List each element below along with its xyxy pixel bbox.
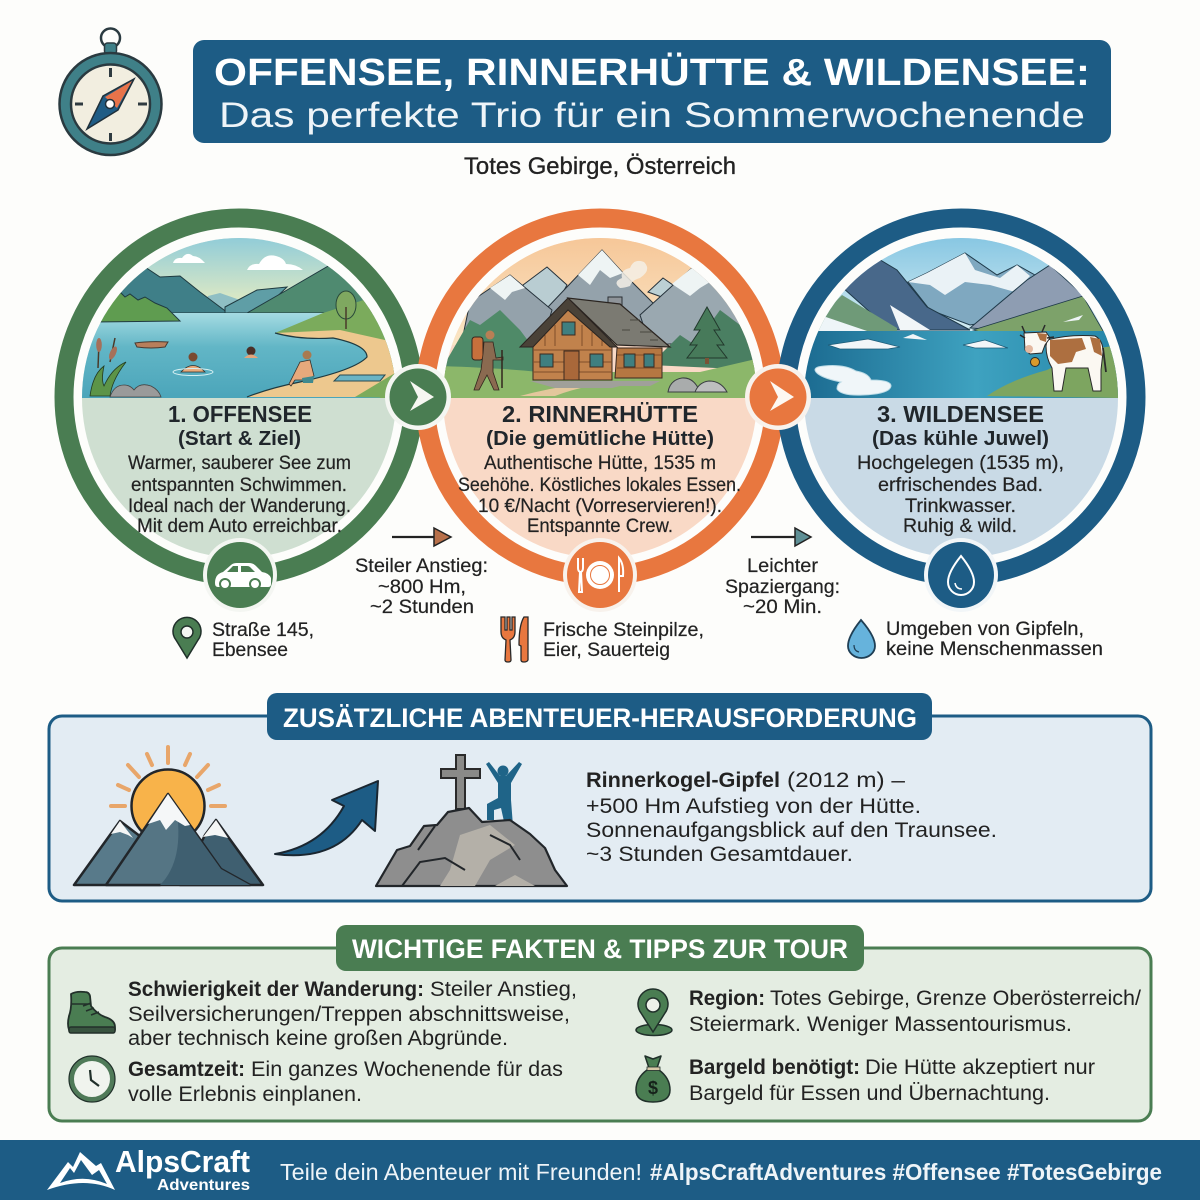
arrow: ascent to Rinnerhütte xyxy=(392,528,451,546)
icon: money bag: $ xyxy=(648,1078,658,1098)
text: no crowds: keine Menschenmassen xyxy=(886,639,1103,660)
text: Offensee description: entspannten Schwimmen. xyxy=(131,475,347,496)
text: Rinnerkogel details: ~3 Stunden Gesamtdauer. xyxy=(586,843,853,866)
text: Wildensee description: Ruhig & wild. xyxy=(903,516,1017,537)
scene: mountain hut with hiker xyxy=(440,235,760,398)
icon: fork and knife xyxy=(501,617,528,662)
heading: Rinnerhütte: (Die gemütliche Hütte) xyxy=(486,428,714,450)
text: difficulty xyxy=(128,978,577,1050)
title banner: Das perfekte Trio für ein Sommerwochenende xyxy=(219,96,1085,135)
text: no crowds: Umgeben von Gipfeln, xyxy=(886,619,1084,640)
text: food: Frische Steinpilze, xyxy=(543,620,704,641)
heading: additional challenge: ZUSÄTZLICHE ABENTEUER-HERAUSFORDERUNG xyxy=(283,703,917,733)
text: steep ascent: ~800 Hm, xyxy=(378,577,466,598)
text: easy walk: Spaziergang: xyxy=(725,577,840,598)
heading: key facts xyxy=(336,925,864,971)
heading: Wildensee xyxy=(872,401,1049,450)
icon: car badge xyxy=(203,538,277,612)
heading: Offensee: (Start & Ziel) xyxy=(178,428,301,450)
text: total time: Gesamtzeit: xyxy=(128,1058,245,1081)
text: hashtags: #AlpsCraftAdventures #Offensee #TotesGebirge xyxy=(650,1159,1162,1185)
heading: Rinnerhütte: 2. RINNERHÜTTE xyxy=(502,401,698,427)
text: cash needed xyxy=(689,1056,1095,1105)
icon: compass xyxy=(60,28,162,155)
text: Rinnerhütte description: Entspannte Crew. xyxy=(527,516,673,537)
text: total time: volle Erlebnis einplanen. xyxy=(128,1083,362,1106)
icon: region pin xyxy=(636,989,672,1036)
text: easy walk xyxy=(725,556,840,618)
text: cash needed: Bargeld benötigt: xyxy=(689,1056,860,1079)
icon: plate badge xyxy=(563,538,637,612)
text: Rinnerkogel details xyxy=(586,769,997,866)
text: Offensee description: Ideal nach der Wanderung. xyxy=(128,496,351,517)
text: region: Region: xyxy=(689,987,765,1010)
panel: additional adventure xyxy=(49,693,1151,901)
icon: green next arrow button xyxy=(385,364,451,430)
scene: lake with swimmers xyxy=(80,235,400,398)
heading: Wildensee: 3. WILDENSEE xyxy=(877,401,1044,427)
text: easy walk: ~20 Min. xyxy=(743,597,822,618)
icon: blue drop xyxy=(848,620,875,658)
text: difficulty: Steiler Anstieg, xyxy=(430,978,577,1001)
text: region xyxy=(689,987,1141,1036)
text: steep ascent xyxy=(355,556,488,618)
text: steep ascent: ~2 Stunden xyxy=(370,597,474,618)
text: address: Straße 145, xyxy=(212,620,314,641)
text: Rinnerhütte description xyxy=(458,453,741,537)
text: share call to action: Teile dein Abenteuer mit Freunden! xyxy=(280,1159,642,1185)
icon: location pin xyxy=(173,617,201,658)
cow figure xyxy=(1020,325,1106,391)
panel: Offensee circle xyxy=(64,218,414,576)
text: no crowds xyxy=(886,619,1103,660)
icon: summit cross with climber xyxy=(376,755,567,886)
scene: alpine lake with cow xyxy=(800,235,1120,398)
text: Rinnerhütte description: Authentische Hütte, 1535 m xyxy=(484,453,716,474)
icon: hiking boot xyxy=(68,992,115,1033)
icon: water drop badge xyxy=(924,538,998,612)
text: Wildensee description xyxy=(857,453,1064,537)
arrow: walk to Wildensee xyxy=(751,528,811,546)
text: Wildensee description: Trinkwasser. xyxy=(905,496,1016,517)
footer bar xyxy=(0,1140,1200,1200)
logo: AlpsCraft Adventures: AlpsCraft xyxy=(115,1144,250,1179)
heading: additional challenge xyxy=(267,693,932,740)
text: Offensee description: Mit dem Auto erreichbar. xyxy=(137,516,342,537)
title banner: OFFENSEE, RINNERHÜTTE & WILDENSEE: xyxy=(214,51,1090,94)
text: Wildensee description: erfrischendes Bad. xyxy=(878,475,1043,496)
heading: Wildensee: (Das kühle Juwel) xyxy=(872,428,1049,450)
text: total time: Ein ganzes Wochenende für das xyxy=(251,1058,563,1081)
text: address xyxy=(212,620,314,661)
icon: money bag xyxy=(636,1056,670,1102)
heading: Offensee xyxy=(168,401,312,450)
panel: Wildensee circle xyxy=(786,218,1136,576)
heading: key facts: WICHTIGE FAKTEN & TIPPS ZUR TOUR xyxy=(352,934,848,964)
icon: mountains with sunrise xyxy=(74,747,263,885)
text: Rinnerkogel details: (2012 m) – xyxy=(787,769,905,792)
text: Offensee description: Warmer, sauberer See zum xyxy=(128,453,351,474)
text: difficulty: Schwierigkeit der Wanderung: xyxy=(128,978,424,1001)
panel: Rinnerhütte circle xyxy=(425,218,775,576)
icon: orange next arrow button xyxy=(745,364,811,430)
text: food: Eier, Sauerteig xyxy=(543,640,670,661)
icon: clock xyxy=(69,1056,115,1102)
text: Wildensee description: Hochgelegen (1535 m), xyxy=(857,453,1064,474)
heading: Rinnerhütte xyxy=(486,401,714,450)
text: difficulty: aber technisch keine großen Abgründe. xyxy=(128,1027,508,1050)
arrow: upward blue xyxy=(275,781,378,855)
panel: facts and tips xyxy=(49,925,1151,1121)
text: easy walk: Leichter xyxy=(747,556,819,577)
text: total time xyxy=(128,1058,563,1106)
text: cash needed: Bargeld für Essen und Übernachtung. xyxy=(689,1082,1050,1105)
text: Rinnerhütte description: 10 €/Nacht (Vorreservieren!). xyxy=(478,496,722,517)
text: Rinnerkogel details: Sonnenaufgangsblick auf den Traunsee. xyxy=(586,819,997,842)
text: region: Steiermark. Weniger Massentourismus. xyxy=(689,1013,1072,1036)
text: Offensee description xyxy=(128,453,351,537)
text: address: Ebensee xyxy=(212,640,288,661)
text: food xyxy=(543,620,704,661)
text: Rinnerhütte description: Seehöhe. Köstliches lokales Essen. xyxy=(458,475,741,496)
text: Rinnerkogel details: +500 Hm Aufstieg von der Hütte. xyxy=(586,795,921,818)
title banner xyxy=(193,40,1111,143)
text: region: Totes Gebirge, Grenze Oberösterreich/ xyxy=(770,987,1141,1010)
logo: AlpsCraft Adventures: Adventures xyxy=(157,1177,250,1194)
logo: AlpsCraft Adventures xyxy=(47,1144,250,1194)
heading: Offensee: 1. OFFENSEE xyxy=(168,401,312,427)
text: Rinnerkogel details: Rinnerkogel-Gipfel xyxy=(586,769,780,792)
text: cash needed: Die Hütte akzeptiert nur xyxy=(865,1056,1095,1079)
text: steep ascent: Steiler Anstieg: xyxy=(355,556,488,577)
text: difficulty: Seilversicherungen/Treppen abschnittsweise, xyxy=(128,1003,570,1026)
subtitle: Totes Gebirge, Österreich xyxy=(464,153,736,180)
